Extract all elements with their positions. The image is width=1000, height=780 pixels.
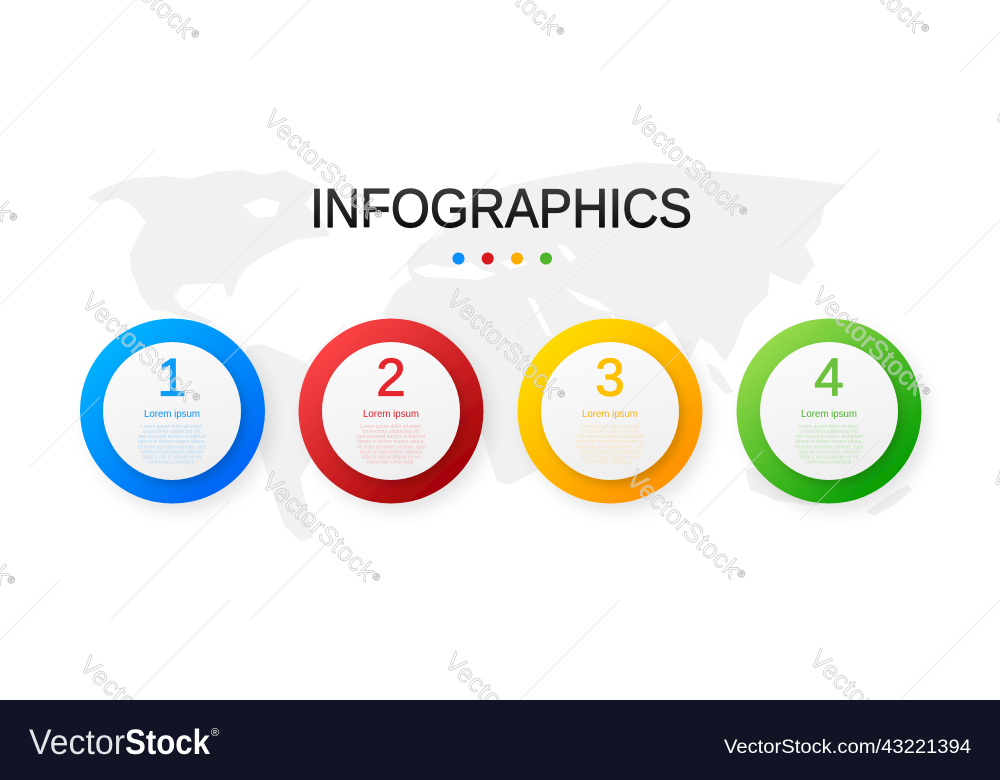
watermarks: ® [4,574,18,587]
footer bar [0,700,1000,780]
watermarks: VectorStock [258,103,384,224]
watermarks: ® [918,22,932,35]
step 2: red circle [298,318,484,504]
step 4: green circle: Lorem ipsum [801,408,857,420]
watermarks: ® [369,571,383,584]
watermarks: ® [736,205,750,218]
footer logo: ® [211,727,219,739]
footer logo: Vector [29,723,125,762]
watermarks: VectorStock [621,463,747,584]
watermarks: ® [552,751,566,764]
step 2: red circle: commodo consequat. [367,460,415,466]
step 3: yellow circle: laboris nisi ut aliquip ex ea [581,455,640,461]
step 2: red circle: sed eiusmod tempor incididunt [357,434,426,440]
watermarks: VectorStock [804,643,930,764]
watermarks: VectorStock [623,100,749,221]
step 4: green circle [736,318,922,504]
watermarks: ® [734,568,748,581]
watermarks: ® [371,208,385,221]
watermarks: ® [919,385,933,398]
step 1: blue circle: Lorem ipsum dolor sit amet, [141,424,203,430]
step 3: yellow circle: Lorem ipsum dolor sit amet, [579,424,641,430]
step 1: blue circle: labore et dolore magna aliqua. [138,439,206,445]
step 4: green circle: nostrud exercitation ullamco [798,449,860,455]
step 1: blue circle: laboris nisi ut aliquip ex ea [143,455,202,461]
step 4: green circle: laboris nisi ut aliquip ex ea [800,455,859,461]
watermarks: ® [553,25,567,38]
step 1: blue circle: nostrud exercitation ullamco [141,449,203,455]
step 4: green circle: sed eiusmod tempor incididunt [795,434,864,440]
step 3: yellow circle: nostrud exercitation ullamco [579,449,641,455]
watermarks: ® [917,748,931,761]
step 4: green circle: labore et dolore magna aliqua. [795,439,863,445]
watermarks: VectorStock [806,280,932,401]
footer image id: VectorStock.com/43221394 [724,736,971,758]
watermarks: ® [6,211,20,224]
step 1: blue circle [80,318,265,504]
step 3: yellow circle: Lorem ipsum [582,408,638,420]
step 3: yellow circle: 3 [595,348,625,408]
step 3: yellow circle: consectetur adipiscing elit, [581,429,639,435]
step 4: green circle: consectetur adipiscing elit, [800,429,858,435]
step 4: green circle: commodo consequat. [805,460,853,466]
watermarks: VectorStock [441,283,567,404]
footer logo: Stock [125,723,210,762]
step 1: blue circle: sed eiusmod tempor incididunt [138,434,207,440]
step 3: yellow circle: commodo consequat. [586,460,634,466]
watermarks: ® [189,391,203,404]
colour dots [452,252,552,264]
world map [88,162,912,541]
step 3: yellow circle: sed eiusmod tempor incididunt [576,434,645,440]
step 2: red circle: Ut enim ad minim veniam, quis [357,444,426,450]
watermarks: ® [554,388,568,401]
step 1: blue circle: Ut enim ad minim veniam, quis [138,444,207,450]
step 3: yellow circle: Ut enim ad minim veniam, quis [576,444,645,450]
step 4: green circle: Lorem ipsum dolor sit amet, [798,424,860,430]
step 1: blue circle: consectetur adipiscing elit, [143,429,201,435]
step 1: blue circle: commodo consequat. [148,460,196,466]
watermarks: ® [187,754,201,767]
step 3: yellow circle [518,318,702,504]
step 2: red circle: 2 [376,348,406,408]
step 2: red circle: consectetur adipiscing elit, [362,429,420,435]
footer logo [29,723,219,762]
step 2: red circle: Lorem ipsum dolor sit amet, [360,424,422,430]
step 1: blue circle: Lorem ipsum [144,408,200,420]
step 2: red circle: nostrud exercitation ullamco [360,449,422,455]
step 1: blue circle: 1 [157,348,187,408]
step 2: red circle: laboris nisi ut aliquip ex ea [362,455,421,461]
watermarks: VectorStock [76,286,202,407]
step 4: green circle: Ut enim ad minim veniam, quis [795,444,864,450]
step 3: yellow circle: labore et dolore magna aliqua. [576,439,644,445]
step 4: green circle: 4 [814,348,844,408]
step 2: red circle: labore et dolore magna aliqua. [357,439,425,445]
watermarks: VectorStock [439,646,565,767]
watermarks: VectorStock [256,466,382,587]
step 2: red circle: Lorem ipsum [363,408,419,420]
watermarks: VectorStock [74,649,200,770]
watermarks: ® [188,28,202,41]
title: INFOGRAPHICS [310,177,692,239]
